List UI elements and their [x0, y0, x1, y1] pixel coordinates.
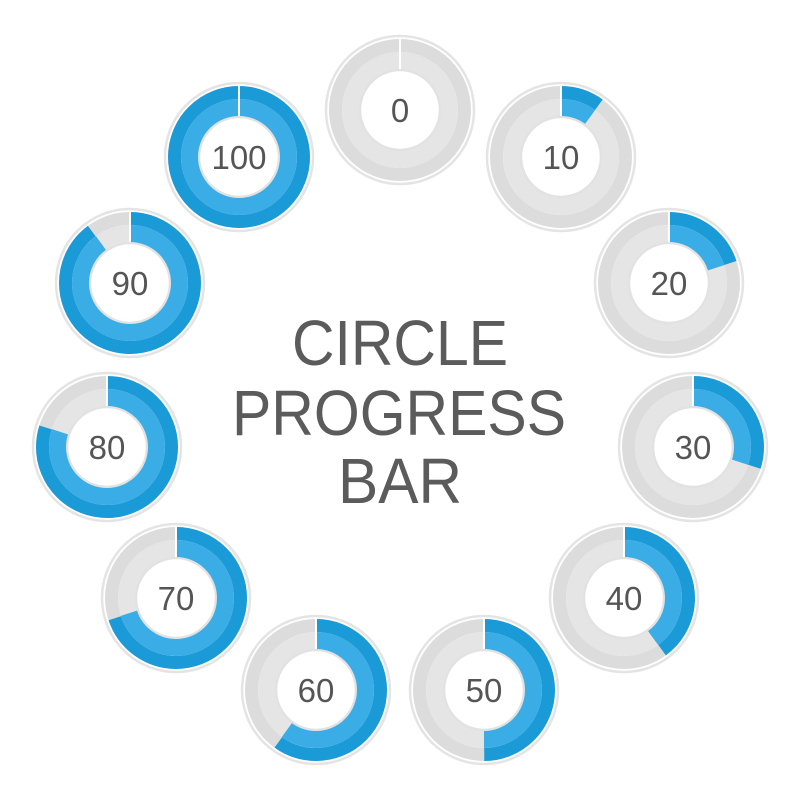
progress circle 50 — [410, 616, 558, 764]
progress circle 80 — [33, 373, 181, 521]
progress circle 40 — [550, 524, 698, 672]
progress circle 50: 50 — [466, 672, 502, 709]
progress circle 0: 0 — [391, 92, 409, 129]
progress circle 60: 60 — [298, 672, 334, 709]
progress circle 100 — [165, 83, 313, 231]
title — [232, 307, 566, 517]
progress circle 60 — [242, 616, 390, 764]
progress circle 0 — [326, 36, 474, 184]
progress circle 100: 100 — [211, 139, 267, 176]
progress circle 90 — [56, 209, 204, 357]
progress circle 10 — [487, 83, 635, 231]
progress circle 20: 20 — [651, 265, 687, 302]
progress circle 90: 90 — [112, 265, 148, 302]
title: BAR — [338, 445, 462, 517]
progress circle 20 — [595, 209, 743, 357]
progress circle 80: 80 — [89, 429, 125, 466]
progress circle 70: 70 — [158, 580, 194, 617]
progress circle 40: 40 — [606, 580, 642, 617]
progress circle 10: 10 — [543, 139, 579, 176]
progress circle 70 — [102, 524, 250, 672]
progress circle 30: 30 — [675, 429, 711, 466]
title: CIRCLE — [292, 307, 508, 379]
title: PROGRESS — [232, 377, 566, 449]
progress circle 30 — [619, 373, 767, 521]
